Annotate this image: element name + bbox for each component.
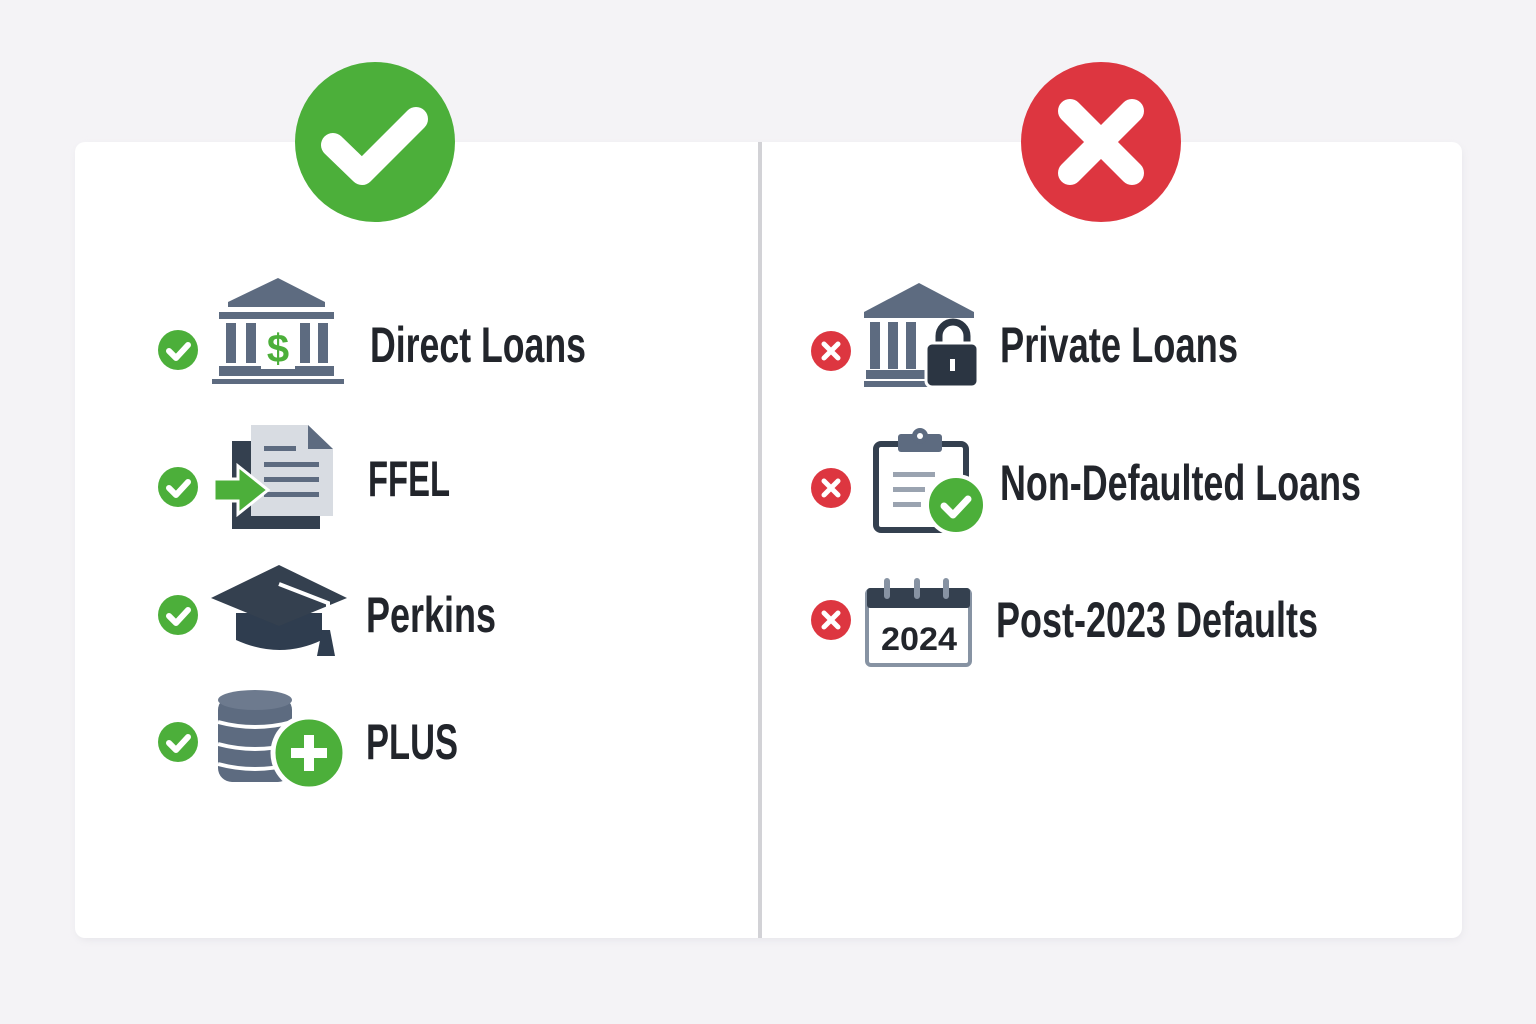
item: PLUS — [158, 690, 458, 789]
icon: big green check — [295, 62, 455, 222]
item: Private Loans: Private Loans — [1000, 317, 1238, 373]
item: Post-2023 Defaults: Post-2023 Defaults — [996, 592, 1318, 648]
item: Post-2023 Defaults — [811, 581, 1318, 665]
item: PLUS: PLUS — [366, 714, 458, 770]
icon: big red x — [1021, 62, 1181, 222]
item: Perkins — [158, 565, 496, 656]
item: Non-Defaulted Loans: Non-Defaulted Loans — [1000, 455, 1361, 511]
item: Perkins: Perkins — [366, 587, 496, 643]
item: Non-Defaulted Loans — [811, 428, 1361, 534]
item: Direct Loans: Direct Loans — [370, 317, 586, 373]
item: FFEL — [158, 425, 450, 529]
item: Direct Loans: $ — [267, 327, 289, 371]
item: Private Loans — [811, 283, 1238, 387]
item: FFEL: FFEL — [368, 451, 450, 507]
item: Post-2023 Defaults: 2024 — [881, 621, 957, 657]
item: Direct Loans — [158, 278, 586, 384]
panel: white card — [75, 142, 1462, 940]
